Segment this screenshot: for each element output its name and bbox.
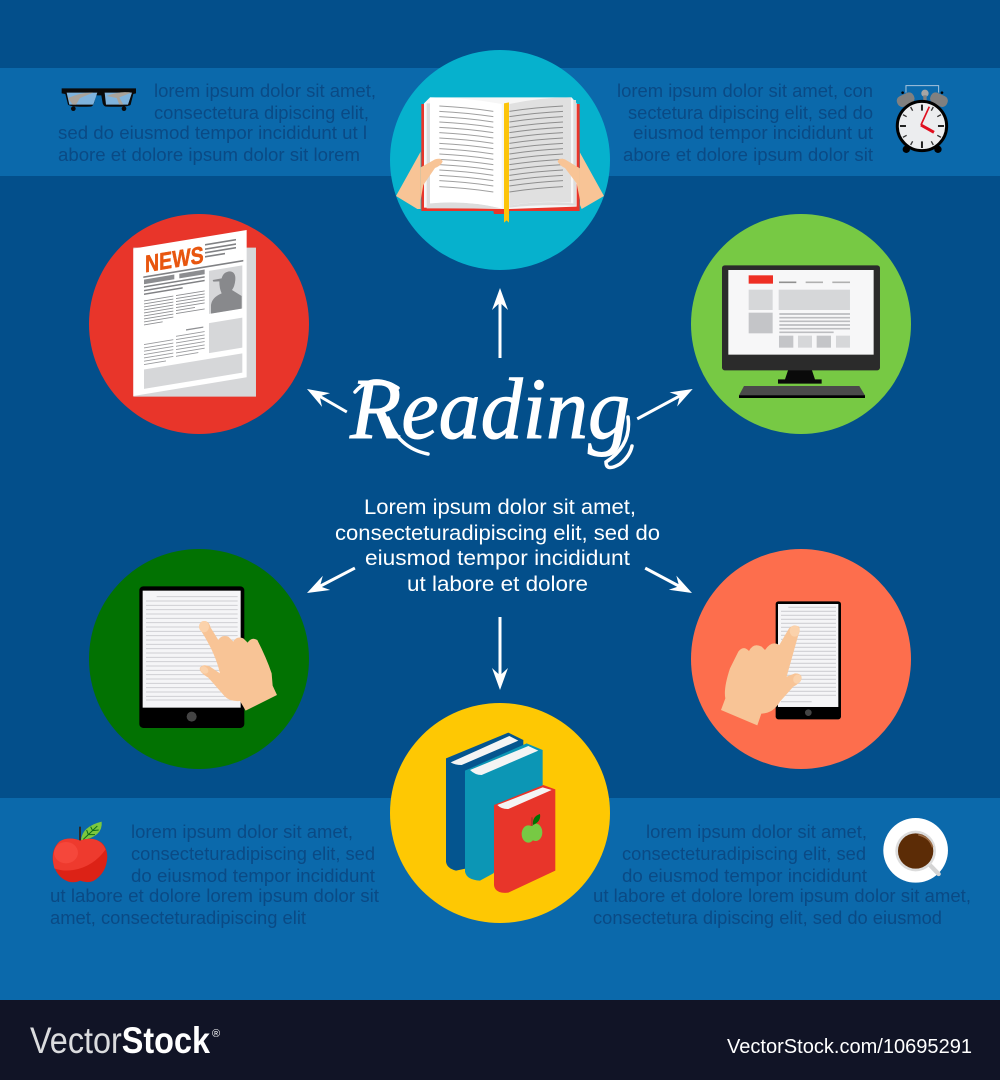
right hand wrist — [580, 153, 604, 209]
icon: glasses — [62, 88, 136, 111]
text: top right: lorem ipsum dolor sit amet, con — [617, 81, 873, 101]
text: bottom right — [593, 822, 971, 928]
center text: Lorem ipsum dolor sit amet, — [364, 496, 636, 519]
tablet screen — [143, 591, 241, 708]
text: bottom left — [50, 822, 379, 928]
circle: newspaper — [89, 214, 309, 434]
hand — [199, 621, 277, 711]
text: top left: sed do eiusmod tempor incididunt ut l — [58, 123, 367, 143]
text: top right: abore et dolore ipsum dolor sit — [623, 145, 873, 165]
tablet text lines — [146, 597, 238, 700]
footer bar — [0, 1000, 1000, 1080]
icon: alarm clock — [895, 86, 950, 153]
center text: eiusmod tempor incididunt — [365, 547, 630, 570]
circle: phone — [691, 549, 911, 769]
tablet body — [139, 586, 244, 728]
text lines right page — [509, 106, 563, 192]
footer image id: VectorStock.com/10695291 — [727, 1036, 972, 1058]
text: bottom right: consecteturadipiscing elit, sed — [622, 844, 866, 864]
monitor stand — [778, 369, 822, 384]
circle: tablet — [89, 549, 309, 769]
text: bottom left: consecteturadipiscing elit, sed — [131, 844, 375, 864]
text: top right: eiusmod tempor incididunt ut — [633, 123, 873, 143]
monitor frame — [722, 265, 880, 370]
red book — [494, 785, 555, 893]
footer logo: VectorStock — [30, 1020, 210, 1061]
text: top left: lorem ipsum dolor sit amet, — [154, 81, 376, 101]
blue book — [446, 733, 523, 871]
arrow: up left — [303, 382, 351, 419]
text: bottom left: lorem ipsum dolor sit amet, — [131, 822, 353, 842]
text: top left: abore et dolore ipsum dolor sit lorem — [58, 145, 360, 165]
center text — [335, 496, 660, 596]
left hand wrist — [396, 152, 421, 209]
text lines left page — [439, 106, 493, 192]
tablet button — [187, 712, 197, 722]
circle: books — [390, 703, 610, 923]
bottom band — [0, 798, 1000, 1000]
text: top right: sectetura dipiscing elit, sed do — [628, 103, 873, 123]
phone body — [776, 601, 841, 719]
apple emblem — [522, 825, 535, 843]
right page — [509, 97, 571, 206]
arrow: down right — [641, 561, 696, 600]
person silhouette — [211, 271, 242, 314]
title: Reading — [349, 360, 630, 457]
right thumb — [558, 159, 580, 200]
icon: coffee cup — [883, 818, 948, 883]
icon: apple — [53, 822, 107, 882]
text: top left — [58, 81, 376, 165]
phone text lines — [781, 607, 836, 702]
text: top left: consectetura dipiscing elit, — [154, 103, 369, 123]
pages under layer — [424, 97, 577, 209]
NEWS headline: NEWS — [145, 242, 204, 278]
text: bottom left: ut labore et dolore lorem ipsum dolor sit — [50, 886, 379, 906]
center text: consecteturadipiscing elit, sed do — [335, 522, 660, 545]
text: bottom right: do eiusmod tempor incididunt — [622, 866, 867, 886]
top band — [0, 68, 1000, 176]
teal book — [465, 743, 543, 881]
text: bottom left: amet, consecteturadipiscing elit — [50, 908, 306, 928]
arrow: down — [492, 617, 508, 690]
circle: open book — [390, 50, 610, 270]
monitor screen — [728, 270, 874, 355]
book cover — [421, 104, 580, 214]
circle: desktop monitor — [691, 214, 911, 434]
bookmark — [504, 102, 509, 223]
back sheet — [133, 248, 256, 397]
left page — [430, 97, 502, 208]
text: bottom right: lorem ipsum dolor sit amet, — [646, 822, 867, 842]
text: bottom left: do eiusmod tempor incididunt — [131, 866, 375, 886]
text: top right — [617, 81, 873, 165]
text: bottom right: consectetura dipiscing elit, sed do eiusmod — [593, 908, 942, 928]
center text: ut labore et dolore — [407, 573, 588, 596]
front page — [133, 230, 247, 396]
arrow: up — [492, 288, 508, 358]
phone screen — [778, 604, 838, 707]
arrow: up right — [633, 382, 696, 426]
hand — [721, 626, 802, 725]
arrow: down left — [303, 561, 359, 600]
phone button — [805, 709, 812, 716]
footer registered mark: ® — [212, 1028, 220, 1040]
keyboard — [739, 386, 865, 398]
text: bottom right: ut labore et dolore lorem ipsum dolor sit amet, — [593, 886, 971, 906]
left thumb — [421, 159, 443, 200]
